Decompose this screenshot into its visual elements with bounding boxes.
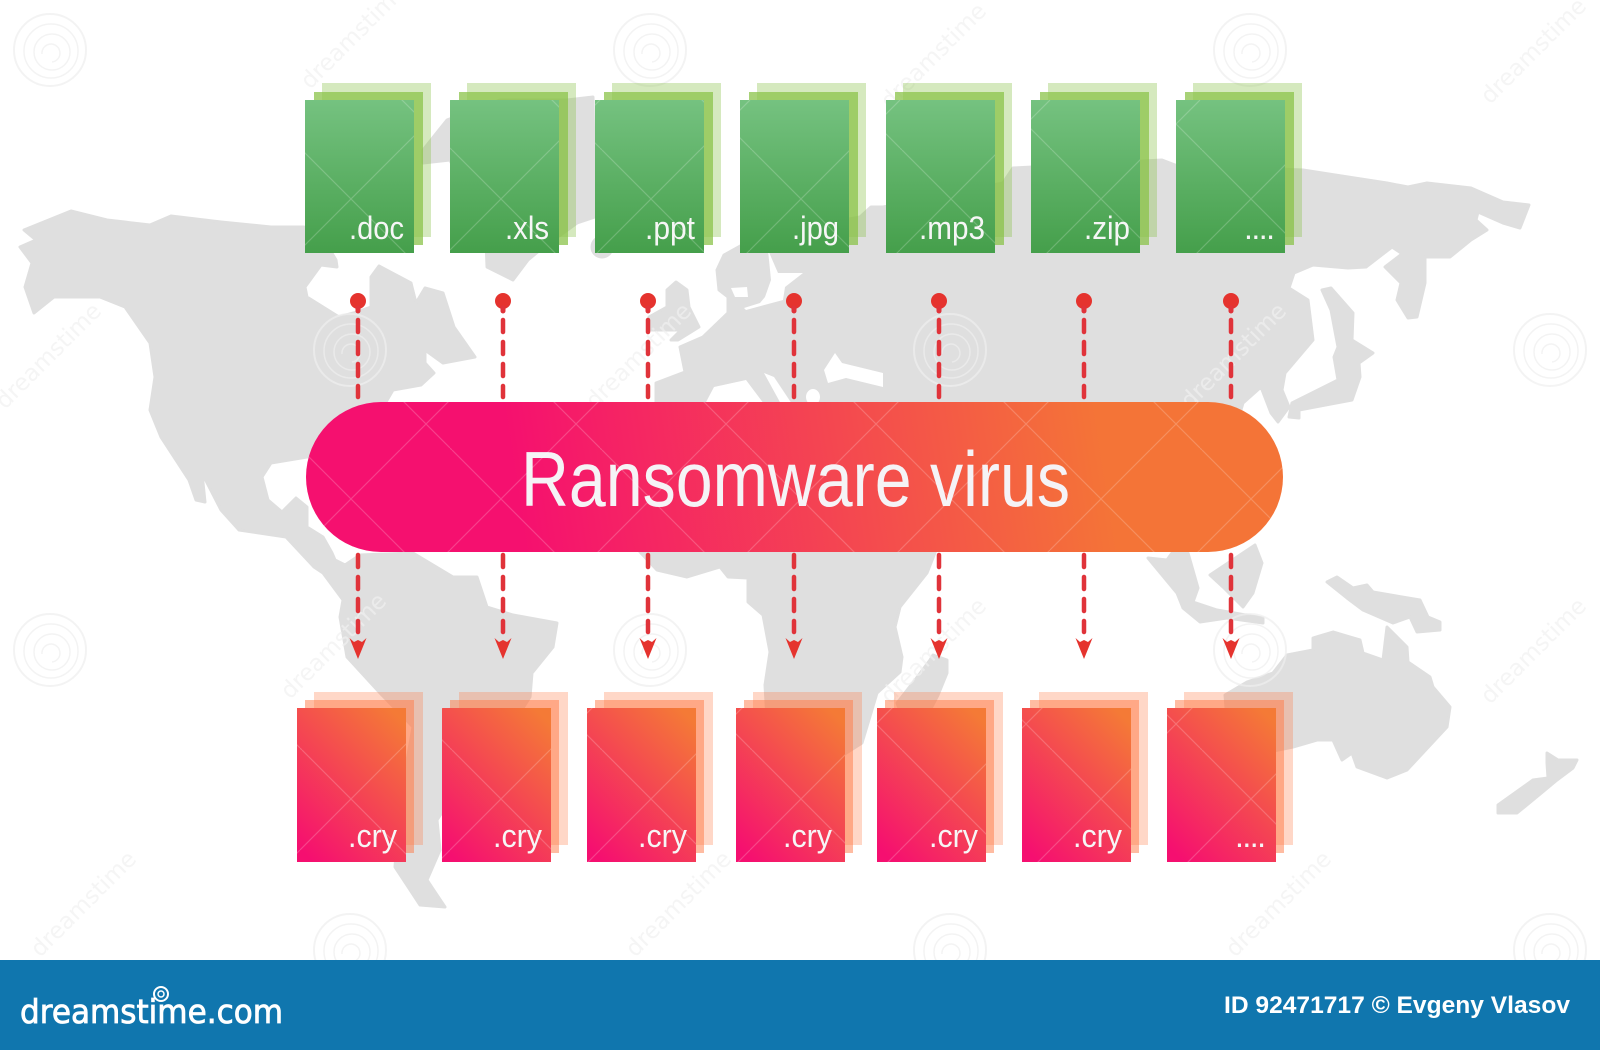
file: more encrypted <box>1167 692 1293 862</box>
sea: Black Sea <box>824 353 883 387</box>
arrow column 4 <box>786 293 802 659</box>
file: .zip <box>1031 83 1157 253</box>
file: .ppt: .ppt <box>645 210 695 246</box>
map: Eurasia <box>656 160 1529 430</box>
watermark text: dreamstime <box>581 298 697 414</box>
file: .cry 6 <box>1022 692 1148 862</box>
red encrypted files row <box>297 692 1293 862</box>
file: .cry 3: .cry <box>638 818 687 854</box>
dashed arrows from source files to bar and down to encrypted files <box>350 293 1240 659</box>
watermark text: dreamstime <box>876 593 992 709</box>
sea: North Sea pocket <box>731 287 748 297</box>
file: .xls: .xls <box>505 210 549 246</box>
file: .xls <box>450 83 576 253</box>
world map background <box>20 97 1577 907</box>
footer credit: ID 92471717 © Evgeny Vlasov <box>1224 992 1571 1019</box>
file: .ppt <box>595 83 721 253</box>
watermark text: dreamstime <box>876 0 992 114</box>
file: .cry 1 <box>297 692 423 862</box>
ransomware virus bar <box>306 402 1283 552</box>
footer band <box>0 960 1600 1050</box>
map: Americas <box>20 211 557 907</box>
watermark text: dreamstime <box>26 846 142 962</box>
sea: Aegean <box>806 389 820 405</box>
file: .cry 2 <box>442 692 568 862</box>
sea: Mediterranean <box>705 380 764 404</box>
map: New Zealand <box>1498 753 1577 813</box>
map: Japan <box>1289 288 1373 418</box>
file: .zip: .zip <box>1084 210 1130 246</box>
map: New Guinea <box>1327 577 1440 632</box>
file: .cry 4: .cry <box>783 818 832 854</box>
map seas <box>705 250 883 405</box>
file: .jpg <box>740 83 866 253</box>
map: Iceland <box>592 237 612 257</box>
arrow column 5 <box>930 293 948 659</box>
green source files row <box>305 83 1302 253</box>
arrow column 6 <box>1076 293 1092 659</box>
sea: Baltic <box>744 250 803 310</box>
map: Greenland <box>423 97 595 280</box>
map: Australia <box>1225 627 1450 778</box>
file: more: .... <box>1244 210 1275 246</box>
arrow column 7 <box>1222 293 1240 659</box>
file: more <box>1176 83 1302 253</box>
file: .cry 3 <box>587 692 713 862</box>
watermark text: dreamstime <box>276 588 392 704</box>
file: .doc <box>305 83 431 253</box>
watermark text: dreamstime <box>621 846 737 962</box>
file: .doc: .doc <box>349 210 404 246</box>
file: .cry 2: .cry <box>493 818 542 854</box>
file: .cry 6: .cry <box>1073 818 1122 854</box>
watermark text: dreamstime <box>1176 298 1292 414</box>
arrow column 1 <box>350 293 366 659</box>
file: more encrypted: .... <box>1235 818 1266 854</box>
sea: Adriatic <box>764 373 792 404</box>
file: .mp3: .mp3 <box>919 210 985 246</box>
file: .mp3 <box>886 83 1012 253</box>
file: .cry 5 <box>877 692 1003 862</box>
bar title: Ransomware virus <box>521 435 1070 523</box>
footer logo: dreamstime.com <box>20 992 283 1031</box>
watermark text: dreamstime <box>1476 593 1592 709</box>
arrow column 2 <box>494 293 512 659</box>
file: .jpg: .jpg <box>792 210 839 246</box>
map: Madagascar <box>897 655 947 725</box>
map: Africa <box>635 540 940 760</box>
file: .cry 1: .cry <box>348 818 397 854</box>
map: British Isles <box>649 282 699 340</box>
watermark text: dreamstime <box>1221 846 1337 962</box>
arrow column 3 <box>640 293 656 659</box>
file: .cry 4 <box>736 692 862 862</box>
map: Sumatra and Java <box>1148 553 1263 623</box>
file: .cry 5: .cry <box>929 818 978 854</box>
map: Borneo <box>1210 545 1262 607</box>
